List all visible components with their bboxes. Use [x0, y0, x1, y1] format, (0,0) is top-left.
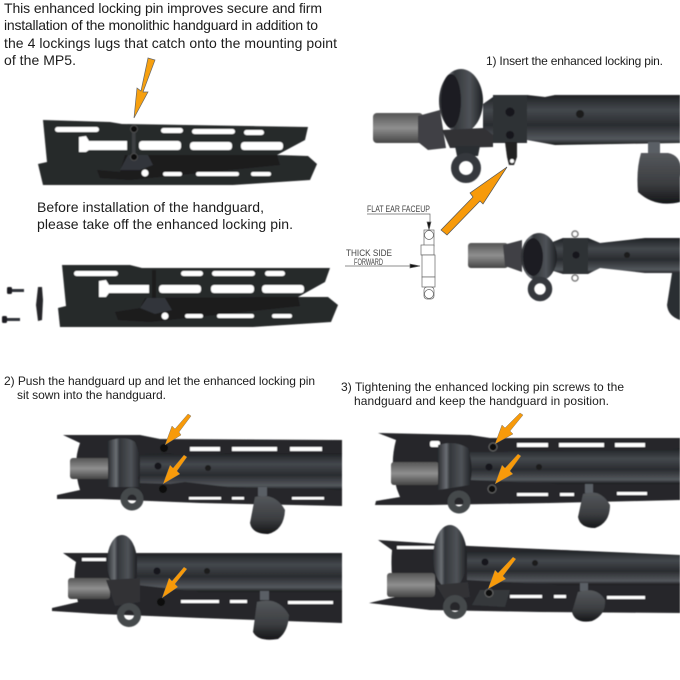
text: step 2: sit sown into the handguard.: [17, 388, 166, 402]
intro text block: the 4 lockings lugs that catch onto the mounting point: [4, 35, 337, 51]
arrow: step 3 side view: [488, 557, 516, 589]
text: step 3: 3) Tightening the enhanced locking pin screws to the: [341, 380, 624, 394]
photo: handguard without pin: [58, 265, 338, 327]
label: flat ear faceup: FLAT EAR FACEUP: [367, 204, 430, 214]
text: step 3: handguard and keep the handguard in position.: [354, 394, 609, 408]
photo: step 2 side view: [52, 535, 342, 640]
arrows: step 3 top view: [495, 413, 523, 484]
diagram: locking pin orientation: [345, 204, 435, 299]
text: removal instruction: Before installation of the handguard,: [37, 199, 264, 215]
text: step 2: [4, 374, 315, 402]
photo: step 2 top view: [57, 435, 342, 534]
intro text block: This enhanced locking pin improves secure and firm: [4, 0, 322, 16]
diagram: locking pin orientation: FORWARD: [354, 257, 383, 267]
arrow: step 2 side view: [162, 567, 187, 598]
photo: step 3 top view: [375, 433, 680, 528]
photo: step 3 side view: [369, 525, 680, 622]
label: thick side forward: THICK SIDE: [346, 248, 392, 258]
photo: receiver with pin inserted: [373, 69, 680, 204]
intro text block: of the MP5.: [4, 52, 76, 68]
arrow: pointing to inserted pin: [441, 167, 507, 235]
text: step 3: [341, 380, 624, 408]
text: step 1: 1) Insert the enhanced locking pin.: [486, 54, 663, 68]
text: removal instruction: [37, 199, 293, 232]
text: step 2: 2) Push the handguard up and let the enhanced locking pin: [4, 374, 315, 388]
arrows: step 2 top view: [163, 414, 191, 484]
text: removal instruction: please take off the enhanced locking pin.: [37, 216, 293, 232]
intro text block: [4, 0, 337, 68]
photo: assembled handguard with locking pin: [38, 120, 317, 185]
photo: screws and locking pin removed: [2, 287, 43, 323]
intro text block: installation of the monolithic handguard in addition to: [4, 17, 318, 33]
photo: receiver with pins: [468, 231, 680, 320]
arrow: pointing to locking pin on handguard: [134, 58, 155, 118]
